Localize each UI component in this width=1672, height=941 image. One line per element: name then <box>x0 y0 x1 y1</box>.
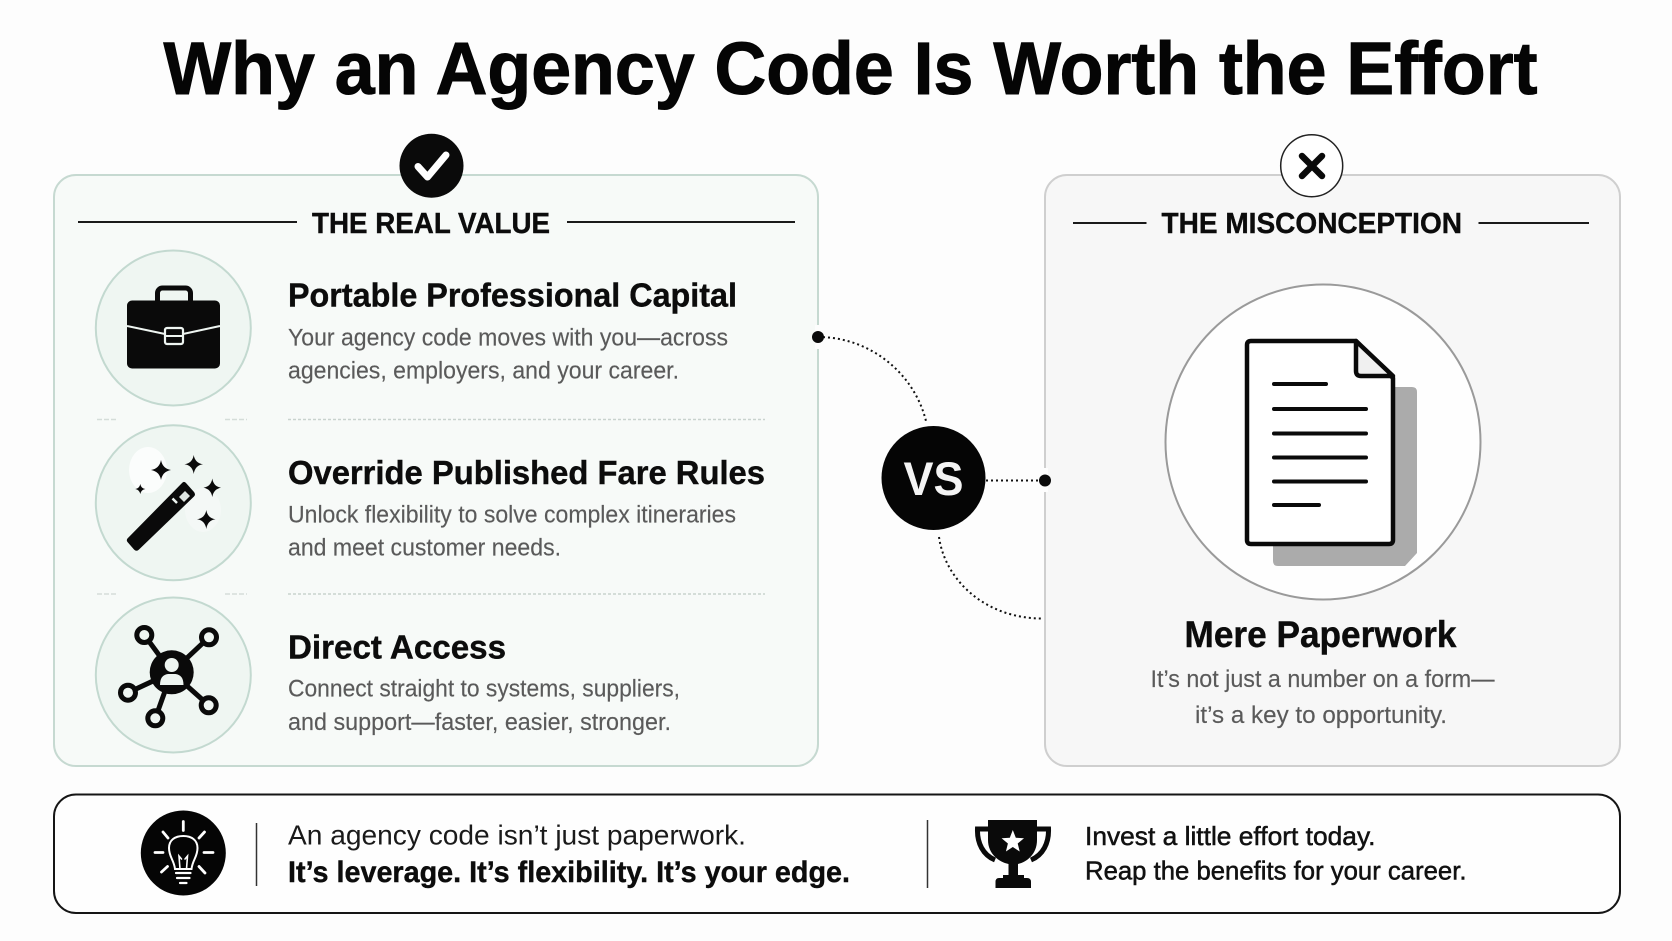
item description <box>288 676 680 736</box>
bottom banner <box>54 794 1620 913</box>
icon: briefcase <box>96 250 251 406</box>
icon: x badge <box>1281 135 1343 197</box>
heading: the misconception: THE MISCONCEPTION <box>1162 208 1462 240</box>
item description <box>288 502 736 562</box>
item description: agencies, employers, and your career. <box>288 358 679 384</box>
misconception description <box>1150 666 1495 729</box>
misconception description: it’s a key to opportunity. <box>1195 702 1447 729</box>
item description: and meet customer needs. <box>288 534 561 562</box>
item description: Connect straight to systems, suppliers, <box>288 676 680 702</box>
connector: vs to misconception <box>986 468 1051 492</box>
item title: Direct Access <box>288 628 506 666</box>
heading: the real value: THE REAL VALUE <box>312 208 550 240</box>
icon: check badge <box>400 134 464 198</box>
item title: Override Published Fare Rules <box>288 454 765 491</box>
icon: network <box>96 598 251 752</box>
title: Why an Agency Code Is Worth the Effort <box>164 27 1538 110</box>
closing statement <box>288 820 850 889</box>
closing statement: It’s leverage. It’s flexibility. It’s your edge. <box>288 856 850 889</box>
connector: value to vs <box>812 325 926 421</box>
item description <box>288 324 728 384</box>
item: override published fare rules <box>96 425 765 580</box>
panel: the real value <box>54 134 818 766</box>
item description: Your agency code moves with you—across <box>288 324 728 352</box>
item description: Unlock flexibility to solve complex itineraries <box>288 502 736 528</box>
vs badge <box>882 426 986 530</box>
item description: and support—faster, easier, stronger. <box>288 709 671 736</box>
panel: the misconception <box>1045 135 1620 766</box>
icon: document <box>1166 284 1480 600</box>
icon: trophy <box>977 820 1049 888</box>
item: portable professional capital <box>96 250 737 406</box>
call to action <box>1085 821 1466 886</box>
item title: Portable Professional Capital <box>288 276 737 314</box>
vs badge: VS <box>904 452 964 505</box>
misconception description: It’s not just a number on a form— <box>1150 666 1495 693</box>
item: direct access <box>96 598 680 752</box>
call to action: Reap the benefits for your career. <box>1085 856 1466 886</box>
icon: magic wand <box>96 425 251 580</box>
closing statement: An agency code isn’t just paperwork. <box>288 820 746 850</box>
icon: light bulb <box>141 810 226 896</box>
call to action: Invest a little effort today. <box>1085 821 1376 851</box>
misconception title: Mere Paperwork <box>1184 614 1457 655</box>
connector: vs curve to misconception <box>939 537 1041 618</box>
